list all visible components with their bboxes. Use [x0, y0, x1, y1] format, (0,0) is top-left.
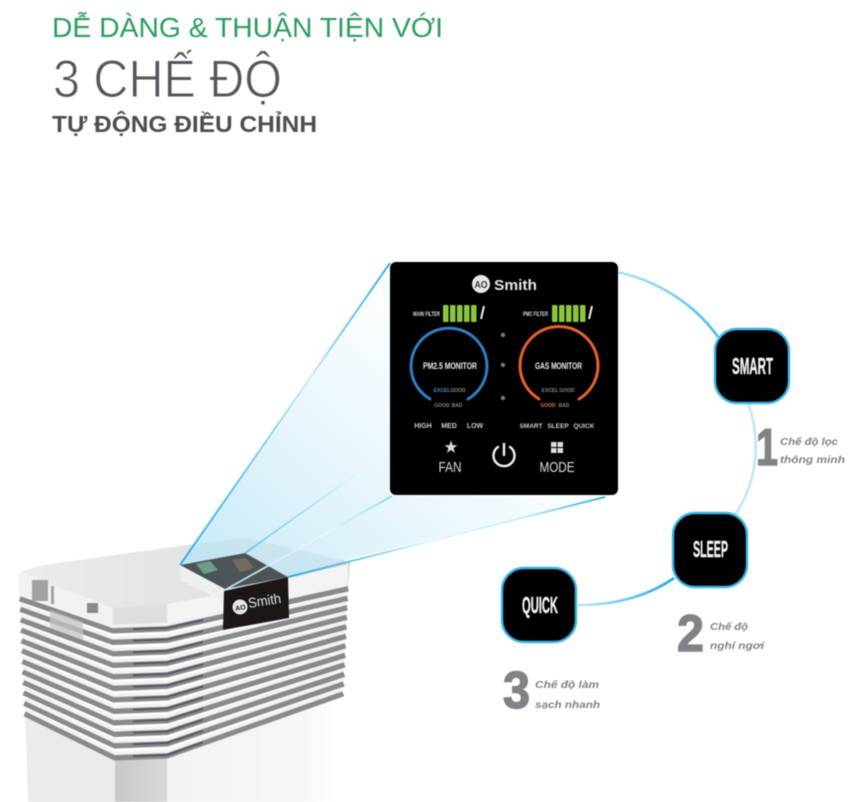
PMC filter indicator	[523, 305, 592, 322]
mode 3 caption: sạch nhanh	[535, 699, 600, 711]
black logo tag: AO	[235, 604, 247, 613]
enlarged control panel	[390, 262, 618, 495]
mode 2 caption: Chế độ	[710, 621, 749, 633]
indicator dots	[501, 333, 505, 400]
mode 3 caption: 3	[503, 662, 530, 720]
brand logo	[472, 275, 537, 294]
fan speed labels: LOW	[467, 423, 484, 430]
purifier front band	[19, 564, 348, 632]
brand logo: Smith	[494, 277, 537, 294]
gas monitor dial: BAD	[559, 403, 570, 409]
side switch	[87, 603, 98, 613]
PM2.5 monitor dial	[411, 328, 487, 409]
mode 2 caption: nghỉ ngơi	[710, 640, 765, 652]
PM2.5 monitor dial: GOOD	[450, 388, 466, 394]
main filter indicator: MAIN FILTER	[413, 312, 440, 318]
connecting arc between modes	[578, 272, 756, 605]
device control panel on top	[180, 553, 288, 602]
gas monitor dial: GOOD	[540, 403, 556, 409]
heading: green line: DỄ DÀNG & THUẬN TIỆN VỚI	[52, 12, 443, 43]
button: QUICK	[502, 568, 576, 642]
button: QUICK: QUICK	[522, 592, 558, 618]
mode 1 caption: Chế độ lọc	[780, 436, 838, 448]
heading: automatic adjustment: TỰ ĐỘNG ĐIỀU CHỈNH	[52, 109, 317, 137]
mode labels	[519, 423, 595, 430]
icon: mode grid	[551, 442, 563, 453]
PMC filter indicator: PMC FILTER	[523, 312, 548, 318]
gas monitor dial	[520, 327, 598, 409]
light beam from device to panel	[180, 263, 605, 590]
button: SLEEP: SLEEP	[693, 536, 728, 562]
gas monitor dial: EXCEL	[542, 388, 558, 394]
mode labels: SMART	[519, 423, 543, 430]
mode 3 caption	[503, 662, 600, 720]
fan speed labels: HIGH	[414, 423, 432, 430]
mode 1 caption: 1	[756, 419, 778, 477]
main filter indicator	[413, 305, 484, 322]
icon: fan: ★	[444, 439, 458, 455]
gas monitor dial: GAS MONITOR	[535, 361, 582, 371]
fan speed labels: MED	[441, 423, 457, 430]
FAN label: FAN	[438, 459, 462, 476]
louvre grille	[20, 584, 348, 757]
mode 3 caption: Chế độ làm	[535, 679, 599, 691]
mode 2 caption: 2	[677, 605, 704, 663]
MODE label: MODE	[540, 459, 574, 476]
vent slots	[32, 580, 54, 604]
brand logo: AO	[474, 280, 488, 291]
icon: power	[494, 444, 514, 466]
black logo tag	[223, 577, 289, 630]
air purifier	[19, 538, 350, 802]
black logo tag: Smith	[247, 590, 282, 611]
gas monitor dial: GOOD	[559, 388, 575, 394]
mode labels: QUICK	[574, 423, 595, 430]
purifier lower body	[25, 695, 335, 802]
button: SLEEP	[673, 513, 747, 587]
mode 1 caption: thông minh	[780, 454, 845, 466]
blurred reflection on louvres	[50, 610, 83, 640]
PM2.5 monitor dial: BAD	[452, 403, 463, 409]
button: SMART	[715, 329, 789, 403]
mode 2 caption	[677, 605, 765, 663]
title block	[52, 12, 443, 137]
PM2.5 monitor dial: GOOD	[434, 403, 450, 409]
PM2.5 monitor dial: EXCEL	[434, 388, 450, 394]
purifier top surface	[20, 538, 350, 610]
mode labels: SLEEP	[547, 423, 569, 430]
heading: 3 modes: 3 CHẾ ĐỘ	[53, 49, 282, 109]
fan speed labels	[414, 423, 484, 430]
PM2.5 monitor dial: PM2.5 MONITOR	[423, 361, 477, 371]
mode 1 caption	[756, 419, 845, 477]
button: SMART: SMART	[732, 353, 773, 379]
